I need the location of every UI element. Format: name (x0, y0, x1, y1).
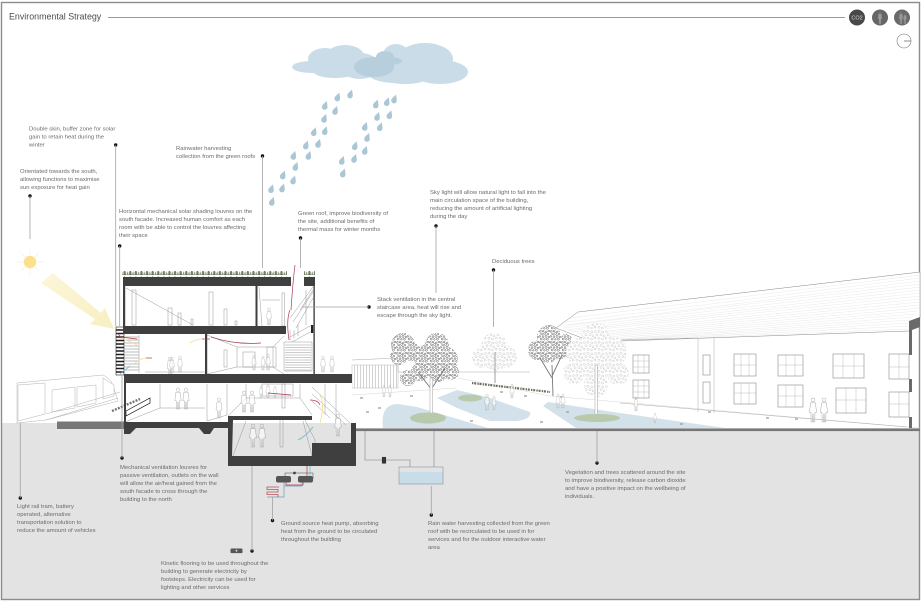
text: mechanical ventilation: passive ventilation, outlets on the wall (120, 473, 219, 479)
ground floor interior lines (125, 384, 350, 456)
end wall (909, 317, 920, 428)
title: Environmental Strategy (9, 12, 102, 22)
text: stack ventilation: Stack ventilation in the central (377, 297, 455, 303)
leader: rain water harvesting (430, 486, 433, 517)
text: rain water harvesting: Rain water harvesting collected from the green (428, 521, 550, 527)
rainwater tank (399, 467, 443, 484)
text: tram: reduce the amount of vehicles (17, 528, 96, 534)
leader: vegetation (595, 431, 599, 465)
text: orientation: sun exposure for heat gain (20, 185, 90, 191)
text: vegetation: to improve biodiversity, release carbon dioxide (565, 478, 686, 484)
ground source heat pump diagram (267, 466, 313, 497)
text: rain water harvesting: area (428, 545, 441, 551)
section: building (112, 265, 356, 466)
wall edges (620, 338, 907, 427)
planting islands (410, 394, 620, 424)
text: heat pump: Ground source heat pump, absorbing (281, 521, 379, 527)
ventilation arrows (117, 265, 322, 440)
leader: tram (19, 423, 22, 500)
text: double skin: gain to retain heat during the (29, 134, 105, 140)
text: mechanical ventilation: Mechanical ventilation louvres for (120, 465, 207, 471)
concrete structure (123, 277, 356, 466)
section: white interiors (125, 286, 352, 423)
rain drops (268, 90, 397, 206)
text: rainwater harvesting: collection from the green roofs (176, 154, 255, 160)
text: louvres: room with be able to control the louvres affecting (119, 225, 246, 231)
leader: ground source heat pump (271, 497, 274, 522)
glazed strip at ground floor (126, 398, 150, 416)
text: kinetic flooring: Kinetic flooring to be used throughout the (161, 561, 269, 567)
outdoor water pools (383, 390, 725, 428)
text: tram: operated, alternative (17, 512, 71, 518)
ground section (2, 423, 919, 599)
text: sky light: main circulation space of the building, (430, 198, 529, 204)
leader: mechanical ventilation (120, 376, 124, 460)
rainwater pipework (365, 431, 434, 467)
icon: sun (17, 249, 43, 275)
windows (633, 354, 909, 417)
text: orientation: Orientated towards the south, (20, 169, 98, 175)
text: green roof: Green roof, improve biodiversity of (298, 211, 388, 217)
first floor interior lines (139, 335, 284, 374)
icon: person (872, 10, 888, 26)
green roof (122, 271, 315, 277)
header rule (108, 16, 845, 18)
icon: people (894, 10, 910, 26)
text: mechanical ventilation: south facade to cross through the (120, 489, 208, 495)
text: sky light: reducing the amount of artificial lighting (430, 206, 532, 212)
icon: north compass (897, 34, 911, 48)
text: double skin: winter (28, 142, 45, 148)
text: mechanical ventilation: building to the north (120, 497, 172, 503)
text: louvres: south facade. Increased human comfort as each (119, 217, 245, 223)
leader: orientation (28, 194, 32, 239)
staircase (284, 325, 312, 371)
people on the site (382, 384, 828, 423)
icon: kinetic floor tile (230, 548, 242, 553)
leader: stack ventilation (302, 305, 371, 309)
text: louvres: their space (119, 233, 149, 239)
tree: dark left (390, 333, 459, 416)
text: vegetation: and have a positive impact on the wellbeing of (565, 486, 686, 492)
site: rear boundary and fence (352, 358, 920, 428)
text: rain water harvesting: services and for the outdoor interactive water (428, 537, 546, 543)
text: stack ventilation: escape through the sky light. (377, 313, 452, 319)
bench planting at south wall (112, 399, 140, 411)
text: deciduous trees: Deciduous trees (492, 259, 535, 265)
text: green roof: the site, additional benefits of (298, 219, 375, 225)
hedge planting (472, 383, 550, 392)
text: vegetation: individuals. (565, 494, 595, 500)
pavement (57, 422, 920, 431)
tree: dark right (528, 325, 572, 396)
roof (556, 272, 920, 341)
text: louvres: Horizontal mechanical solar shading louvres on the (119, 209, 253, 215)
leader: deciduous trees (492, 268, 495, 327)
text: vegetation: Vegetation and trees scattered around the site (565, 470, 686, 476)
solar gain beam arrow (41, 273, 114, 329)
text: rainwater harvesting: Rainwater harvesting (176, 146, 231, 152)
leader: louvres (118, 244, 121, 326)
text: sky light: during the day (430, 214, 467, 220)
text: green roof: thermal mass for winter months (298, 227, 380, 233)
text: sky light: Sky light will allow natural light to fall into the (430, 190, 547, 196)
text: stack ventilation: staircase area, heat will rise and (377, 305, 461, 311)
text: heat pump: throughout the building (281, 537, 341, 543)
text: mechanical ventilation: will allow the air/heat gained from the (119, 481, 218, 487)
tree: light centre (472, 333, 517, 383)
leader: rainwater (261, 154, 264, 268)
leader: kinetic flooring (250, 466, 254, 553)
planting marks across the site (360, 392, 798, 424)
text: tram: Light rail tram, battery (17, 504, 74, 510)
text: double skin: Double skin, buffer zone for solar (29, 126, 115, 132)
tram (17, 375, 120, 423)
cloud (292, 43, 468, 84)
icon: CO2 (849, 10, 865, 26)
tree: light right (563, 323, 629, 416)
text: rain water harvesting: roof with be recirculated to be used in for (428, 529, 534, 535)
text: kinetic flooring: lighting and other services (161, 585, 229, 591)
leader: sky light (434, 224, 438, 293)
leader: green roof (299, 236, 302, 268)
text: kinetic flooring: footsteps. Electricity can be used for (161, 577, 256, 583)
solar shading louvres (116, 327, 139, 375)
text: kinetic flooring: building to generate electricity by (161, 569, 247, 575)
text: tram: transportation solution to (17, 520, 82, 526)
people inside (167, 308, 341, 447)
text: orientation: allowing functions to maximise (20, 177, 100, 183)
leader: double skin (114, 143, 117, 326)
text: heat pump: heat from the ground to be circulated (281, 529, 377, 535)
large building to the north (556, 272, 920, 428)
icon: CO2: CO2 (851, 16, 863, 22)
top floor interior lines (126, 287, 313, 328)
